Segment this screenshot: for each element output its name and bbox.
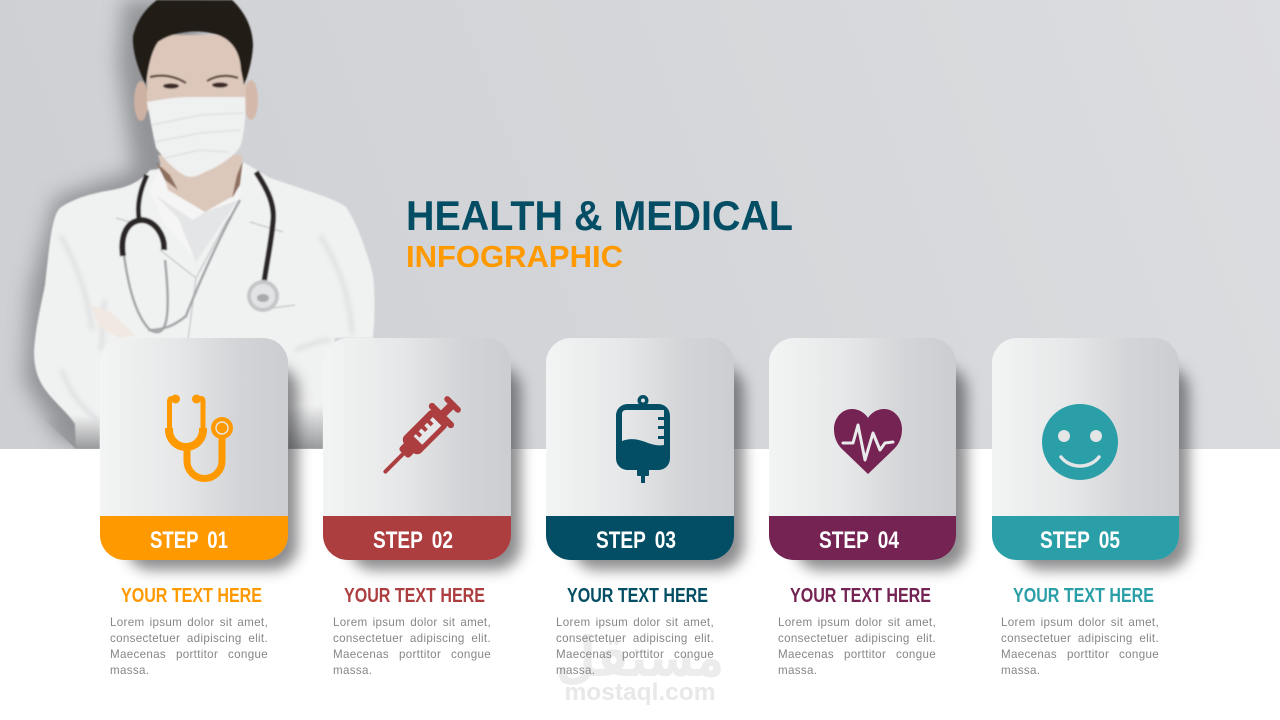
text block: step 03: massa. (556, 664, 595, 677)
card: step 03 (546, 338, 734, 560)
text block: step 02: massa. (333, 664, 372, 677)
card: step 04 (769, 338, 956, 560)
subheadings: YOUR TEXT HERE (567, 585, 708, 607)
card: step 05 (992, 338, 1179, 560)
text block: step 01: massa. (110, 664, 149, 677)
watermark: مستقل (556, 625, 724, 689)
text block: step 04 (778, 616, 936, 677)
card: step 01 (100, 338, 288, 560)
coat (34, 160, 374, 449)
neck (158, 155, 243, 212)
subheadings: YOUR TEXT HERE (121, 585, 262, 607)
text block: step 02 (333, 616, 491, 677)
text block: step 02: Maecenas porttitor congue (333, 648, 491, 661)
coat folds (60, 235, 352, 420)
text block: step 05 (1001, 616, 1159, 677)
title (406, 192, 793, 274)
icon: iv bag (616, 395, 670, 483)
step band: STEP 05 (1040, 527, 1120, 554)
shirt (150, 165, 245, 260)
chest piece (247, 280, 279, 312)
step band (992, 516, 1179, 560)
text block: step 05: Lorem ipsum dolor sit amet, (1001, 616, 1159, 629)
subheadings: YOUR TEXT HERE (1013, 585, 1154, 607)
step band: STEP 01 (150, 527, 228, 554)
text block: step 02: Lorem ipsum dolor sit amet, (333, 616, 491, 629)
text block: step 03: Lorem ipsum dolor sit amet, (556, 616, 714, 629)
subheadings (121, 585, 1154, 607)
ears (134, 81, 148, 121)
text block: step 03: Maecenas porttitor congue (556, 648, 714, 661)
icon: smiley face (1042, 404, 1118, 480)
stethoscope dark tube (122, 172, 273, 290)
text block: step 03 (556, 616, 714, 677)
text block: step 04: massa. (778, 664, 817, 677)
hand (90, 305, 135, 338)
step band (100, 516, 288, 560)
step band (323, 516, 511, 560)
text block: step 01: Maecenas porttitor congue (110, 648, 268, 661)
text block: step 05: consectetuer adipiscing elit. (1001, 632, 1159, 645)
heading: infographic: INFOGRAPHIC (406, 239, 623, 274)
text block: step 04: Maecenas porttitor congue (778, 648, 936, 661)
watermark: mostaql.com (564, 679, 716, 706)
text block: step 04: Lorem ipsum dolor sit amet, (778, 616, 936, 629)
step band: STEP 04 (819, 527, 900, 554)
hair (133, 0, 253, 85)
step band: STEP 02 (373, 527, 453, 554)
icon: syringe (383, 396, 461, 474)
heading: health & medical: HEALTH & MEDICAL (406, 192, 793, 239)
text block: step 01 (110, 616, 268, 677)
text block: step 05: massa. (1001, 664, 1040, 677)
icon: heart with pulse (834, 409, 902, 474)
step band (769, 516, 956, 560)
text block: step 05: Maecenas porttitor congue (1001, 648, 1159, 661)
text block: step 01: consectetuer adipiscing elit. (110, 632, 268, 645)
stethoscope grey tube (124, 200, 240, 332)
subheadings: YOUR TEXT HERE (344, 585, 485, 607)
text block: step 01: Lorem ipsum dolor sit amet, (110, 616, 268, 629)
text block: step 02: consectetuer adipiscing elit. (333, 632, 491, 645)
card: step 02 (323, 338, 511, 560)
subheadings: YOUR TEXT HERE (790, 585, 931, 607)
mask (147, 97, 245, 177)
icon: stethoscope (165, 394, 233, 482)
eyes (150, 76, 238, 83)
grey photo background (0, 0, 1280, 449)
step band (546, 516, 734, 560)
text block: step 03: consectetuer adipiscing elit. (556, 632, 714, 645)
doctor illustration (14, 0, 375, 449)
text block: step 04: consectetuer adipiscing elit. (778, 632, 936, 645)
face (147, 35, 246, 125)
step band: STEP 03 (596, 527, 676, 554)
